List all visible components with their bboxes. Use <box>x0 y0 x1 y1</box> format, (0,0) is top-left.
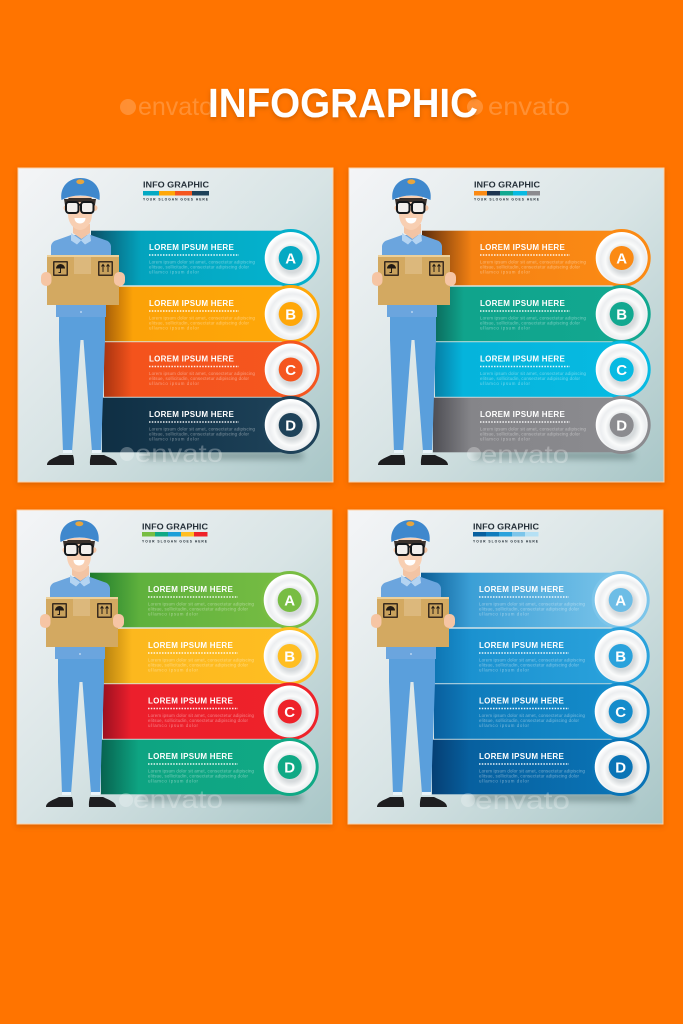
row A <box>421 571 650 629</box>
row C: ullamco ipsum dolor <box>148 723 199 728</box>
row A: Lorem ipsum dolor sit amet, consectetur adipiscing <box>479 602 586 606</box>
row B: Lorem ipsum dolor sit amet, consectetur adipiscing <box>479 658 586 662</box>
row C: Lorem ipsum dolor sit amet, consectetur adipiscing <box>148 713 255 718</box>
delivery man with box <box>372 178 456 465</box>
panel: green amber red teal <box>17 510 332 824</box>
row A: elitsue, sollicitudin, consectetur adipiscing dolor <box>148 606 249 612</box>
row D: elitsue, sollicitudin, consectetur adipiscing dolor <box>148 774 249 778</box>
row B: elitsue, sollicitudin, consectetur adipiscing dolor <box>480 320 581 326</box>
watermark: envato: envato <box>475 787 570 815</box>
row D: LOREM IPSUM HERE <box>479 752 564 761</box>
row A: ullamco ipsum dolor <box>480 270 531 274</box>
row C: elitsue, sollicitudin, consectetur adipiscing dolor <box>149 376 250 381</box>
row A: A <box>284 592 295 609</box>
brand header: YOUR SLOGAN GOES HERE <box>473 540 539 544</box>
row B: LOREM IPSUM HERE <box>148 641 233 650</box>
row B <box>104 627 319 685</box>
row A: elitsue, sollicitudin, consectetur adipiscing dolor <box>479 606 580 612</box>
row C <box>434 682 650 740</box>
row B: B <box>285 306 296 323</box>
row A: LOREM IPSUM HERE <box>479 585 564 594</box>
watermark: envato left of title: envato <box>138 93 213 121</box>
row B: ullamco ipsum dolor <box>149 326 200 330</box>
panel: shades of blue <box>348 510 663 824</box>
row C: Lorem ipsum dolor sit amet, consectetur adipiscing <box>480 371 587 376</box>
row C: ullamco ipsum dolor <box>149 381 200 386</box>
row A <box>422 229 651 287</box>
row D: D <box>616 417 627 434</box>
row D: D <box>615 759 626 776</box>
row A <box>91 229 320 287</box>
row B: elitsue, sollicitudin, consectetur adipiscing dolor <box>149 320 250 326</box>
row A: LOREM IPSUM HERE <box>480 243 565 252</box>
panel: teal orange red navy <box>18 168 333 482</box>
watermark: envato: envato <box>481 441 569 469</box>
row D <box>101 738 319 796</box>
row C <box>103 682 319 740</box>
row D: elitsue, sollicitudin, consectetur adipiscing dolor <box>480 432 581 436</box>
row A: Lorem ipsum dolor sit amet, consectetur adipiscing <box>148 602 255 606</box>
row C: C <box>615 704 626 721</box>
row A: Lorem ipsum dolor sit amet, consectetur adipiscing <box>149 260 256 264</box>
brand header: INFO GRAPHIC <box>142 522 208 532</box>
delivery man with box <box>41 178 125 465</box>
delivery man with box <box>371 520 455 807</box>
row A: elitsue, sollicitudin, consectetur adipiscing dolor <box>480 264 581 270</box>
row C: LOREM IPSUM HERE <box>480 354 565 364</box>
row B: ullamco ipsum dolor <box>148 668 199 672</box>
row A: ullamco ipsum dolor <box>148 612 199 616</box>
row B: B <box>284 648 295 665</box>
row C: LOREM IPSUM HERE <box>149 354 234 364</box>
row B <box>436 285 651 343</box>
brand header: YOUR SLOGAN GOES HERE <box>142 540 208 544</box>
row C: C <box>284 704 295 721</box>
bottom shadow <box>143 452 303 459</box>
row D: D <box>284 759 295 776</box>
row D: LOREM IPSUM HERE <box>149 410 234 419</box>
row D: Lorem ipsum dolor sit amet, consectetur adipiscing <box>480 426 587 432</box>
brand header: INFO GRAPHIC <box>473 522 539 532</box>
row C: ullamco ipsum dolor <box>480 381 531 386</box>
row C: Lorem ipsum dolor sit amet, consectetur adipiscing <box>479 713 586 718</box>
bottom shadow <box>474 452 634 459</box>
row A <box>90 571 319 629</box>
row B: LOREM IPSUM HERE <box>480 299 565 308</box>
row C: LOREM IPSUM HERE <box>479 696 564 706</box>
watermark: envato: envato <box>133 786 223 814</box>
row A: ullamco ipsum dolor <box>149 270 200 274</box>
row D: Lorem ipsum dolor sit amet, consectetur adipiscing <box>148 768 255 774</box>
row B: ullamco ipsum dolor <box>480 326 531 330</box>
row A: LOREM IPSUM HERE <box>148 585 233 594</box>
title: INFOGRAPHIC <box>208 80 478 126</box>
row A: elitsue, sollicitudin, consectetur adipiscing dolor <box>149 264 250 270</box>
row B: Lorem ipsum dolor sit amet, consectetur adipiscing <box>149 316 256 320</box>
row C: elitsue, sollicitudin, consectetur adipiscing dolor <box>148 718 249 723</box>
bottom shadow <box>473 794 633 801</box>
row B <box>435 627 650 685</box>
row D: ullamco ipsum dolor <box>479 778 530 784</box>
brand header: YOUR SLOGAN GOES HERE <box>143 198 209 202</box>
watermark: envato: envato <box>135 440 223 468</box>
bottom shadow <box>142 794 302 801</box>
row D: ullamco ipsum dolor <box>480 436 531 442</box>
row A: A <box>616 250 627 267</box>
row B: ullamco ipsum dolor <box>479 668 530 672</box>
row B: LOREM IPSUM HERE <box>149 299 234 308</box>
row C <box>104 340 320 398</box>
brand header: YOUR SLOGAN GOES HERE <box>474 198 540 202</box>
row D: LOREM IPSUM HERE <box>480 410 565 419</box>
row C: Lorem ipsum dolor sit amet, consectetur adipiscing <box>149 371 256 376</box>
row B: B <box>615 648 626 665</box>
brand header <box>142 522 208 544</box>
brand header: INFO GRAPHIC <box>474 180 540 190</box>
row D: Lorem ipsum dolor sit amet, consectetur adipiscing <box>479 768 586 774</box>
row A: Lorem ipsum dolor sit amet, consectetur adipiscing <box>480 260 587 264</box>
row D <box>432 738 650 796</box>
brand header <box>474 180 540 202</box>
row B: elitsue, sollicitudin, consectetur adipiscing dolor <box>148 662 249 668</box>
row D: D <box>285 417 296 434</box>
row B <box>105 285 320 343</box>
row D: ullamco ipsum dolor <box>149 436 200 442</box>
row C: elitsue, sollicitudin, consectetur adipiscing dolor <box>480 376 581 381</box>
brand header: INFO GRAPHIC <box>143 180 209 190</box>
row C <box>435 340 651 398</box>
row C: C <box>285 362 296 379</box>
row D: ullamco ipsum dolor <box>148 778 199 784</box>
row C: C <box>616 362 627 379</box>
row D: LOREM IPSUM HERE <box>148 752 233 761</box>
row B: B <box>616 306 627 323</box>
row C: ullamco ipsum dolor <box>479 723 530 728</box>
row A: ullamco ipsum dolor <box>479 612 530 616</box>
row D <box>433 396 651 454</box>
watermark: envato <box>461 787 570 815</box>
row C: LOREM IPSUM HERE <box>148 696 233 706</box>
panel: orange green cyan grey <box>349 168 664 482</box>
row B: Lorem ipsum dolor sit amet, consectetur adipiscing <box>480 316 587 320</box>
row D: elitsue, sollicitudin, consectetur adipiscing dolor <box>479 774 580 778</box>
row A: A <box>285 250 296 267</box>
row A: A <box>615 592 626 609</box>
row D <box>102 396 320 454</box>
row D: Lorem ipsum dolor sit amet, consectetur adipiscing <box>149 426 256 432</box>
watermark: envato right of title: envato <box>488 93 570 121</box>
row B: elitsue, sollicitudin, consectetur adipiscing dolor <box>479 662 580 668</box>
brand header <box>473 522 539 544</box>
row C: elitsue, sollicitudin, consectetur adipiscing dolor <box>479 718 580 723</box>
row B: LOREM IPSUM HERE <box>479 641 564 650</box>
delivery man with box <box>40 520 124 807</box>
brand header <box>143 180 209 202</box>
row B: Lorem ipsum dolor sit amet, consectetur adipiscing <box>148 658 255 662</box>
row A: LOREM IPSUM HERE <box>149 243 234 252</box>
row D: elitsue, sollicitudin, consectetur adipiscing dolor <box>149 432 250 436</box>
